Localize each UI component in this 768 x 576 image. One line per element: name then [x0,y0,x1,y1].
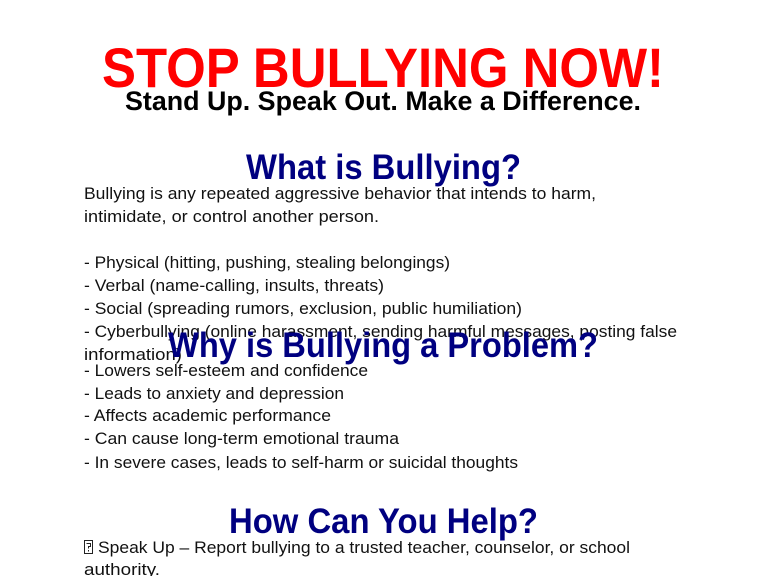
text block: effects of bullying: - Lowers self-esteem and confidence [84,361,368,380]
icon: missing glyph box [84,540,92,554]
heading: why is bullying a problem: Why is Bullying a Problem? [168,326,598,365]
title: STOP BULLYING NOW! [102,36,664,99]
text block: effects of bullying: - In severe cases, leads to self-harm or suicidal thoughts [84,453,518,472]
text block: ways to help: Speak Up – Report bullying to a trusted teacher, counselor, or school [98,538,630,557]
text block: definition and types of bullying: - Cyberbullying (online harassment, sending harmful messages, posting false [84,322,677,341]
text block: definition and types of bullying [84,184,677,364]
text block: definition and types of bullying: - Physical (hitting, pushing, stealing belongings) [84,253,450,272]
heading: what is bullying: What is Bullying? [246,148,521,187]
text block: definition and types of bullying: - Verbal (name-calling, insults, threats) [84,276,384,295]
heading: how can you help: How Can You Help? [229,502,538,541]
text block: definition and types of bullying: Bullying is any repeated aggressive behavior that intends to harm, [84,184,596,203]
text block: effects of bullying: - Can cause long-term emotional trauma [84,429,400,448]
text block: definition and types of bullying: information) [84,345,182,364]
text block: definition and types of bullying: - Social (spreading rumors, exclusion, public humiliation) [84,299,522,318]
text block: effects of bullying: - Affects academic performance [84,406,331,425]
text block: effects of bullying: - Leads to anxiety and depression [84,384,344,403]
text block: effects of bullying [84,361,518,472]
text block: definition and types of bullying: intimidate, or control another person. [84,207,379,226]
subtitle: Stand Up. Speak Out. Make a Difference. [125,86,641,116]
text block: ways to help [84,538,630,576]
